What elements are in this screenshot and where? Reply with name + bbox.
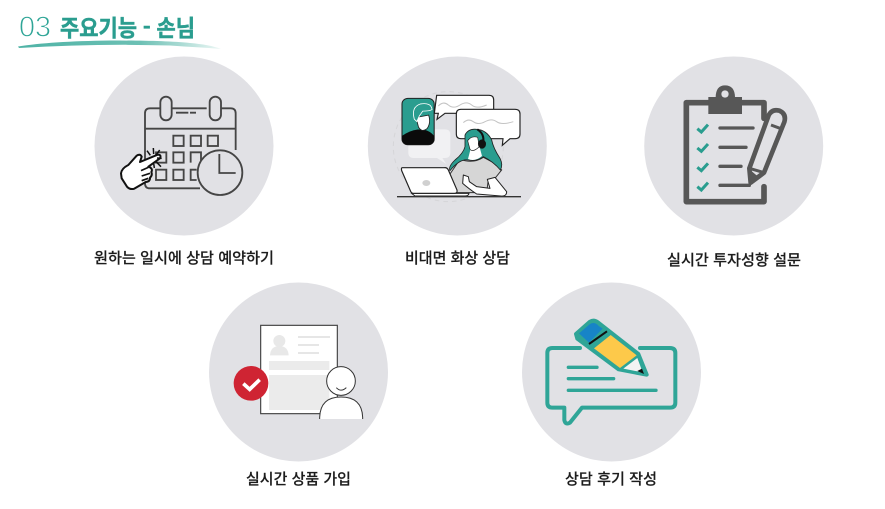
title: 주요기능 - 손님	[60, 9, 195, 43]
circle background	[522, 282, 701, 462]
circle background	[368, 56, 547, 236]
illustration: man on video call	[402, 98, 434, 145]
illustration: woman with headset	[449, 129, 507, 196]
icon: pointing hand	[121, 148, 162, 189]
circle background	[644, 56, 823, 236]
icon: speech bubble and pencil	[547, 321, 675, 424]
panel: investment survey	[644, 56, 823, 270]
panel: remote video consultation	[368, 56, 547, 268]
icon: clipboard with checklist and pencil	[686, 85, 785, 202]
illustration: laptop and desk	[397, 168, 521, 197]
panel: consultation review	[522, 282, 701, 489]
label: 상담 후기 작성	[565, 468, 657, 489]
title: 03	[19, 12, 51, 44]
label: 원하는 일시에 상담 예약하기	[94, 247, 274, 268]
illustration: form with check and person	[234, 325, 363, 419]
label: 비대면 화상 상담	[405, 247, 510, 268]
panel: calendar reservation	[94, 56, 274, 268]
icon: calendar and clock	[145, 97, 242, 195]
panel: product subscription	[209, 282, 388, 489]
circle background	[209, 282, 388, 462]
illustration: chat bubbles	[393, 92, 520, 202]
label: 실시간 상품 가입	[246, 468, 351, 489]
title	[18, 9, 221, 49]
circle background	[94, 56, 274, 236]
label: 실시간 투자성향 설문	[667, 249, 801, 270]
